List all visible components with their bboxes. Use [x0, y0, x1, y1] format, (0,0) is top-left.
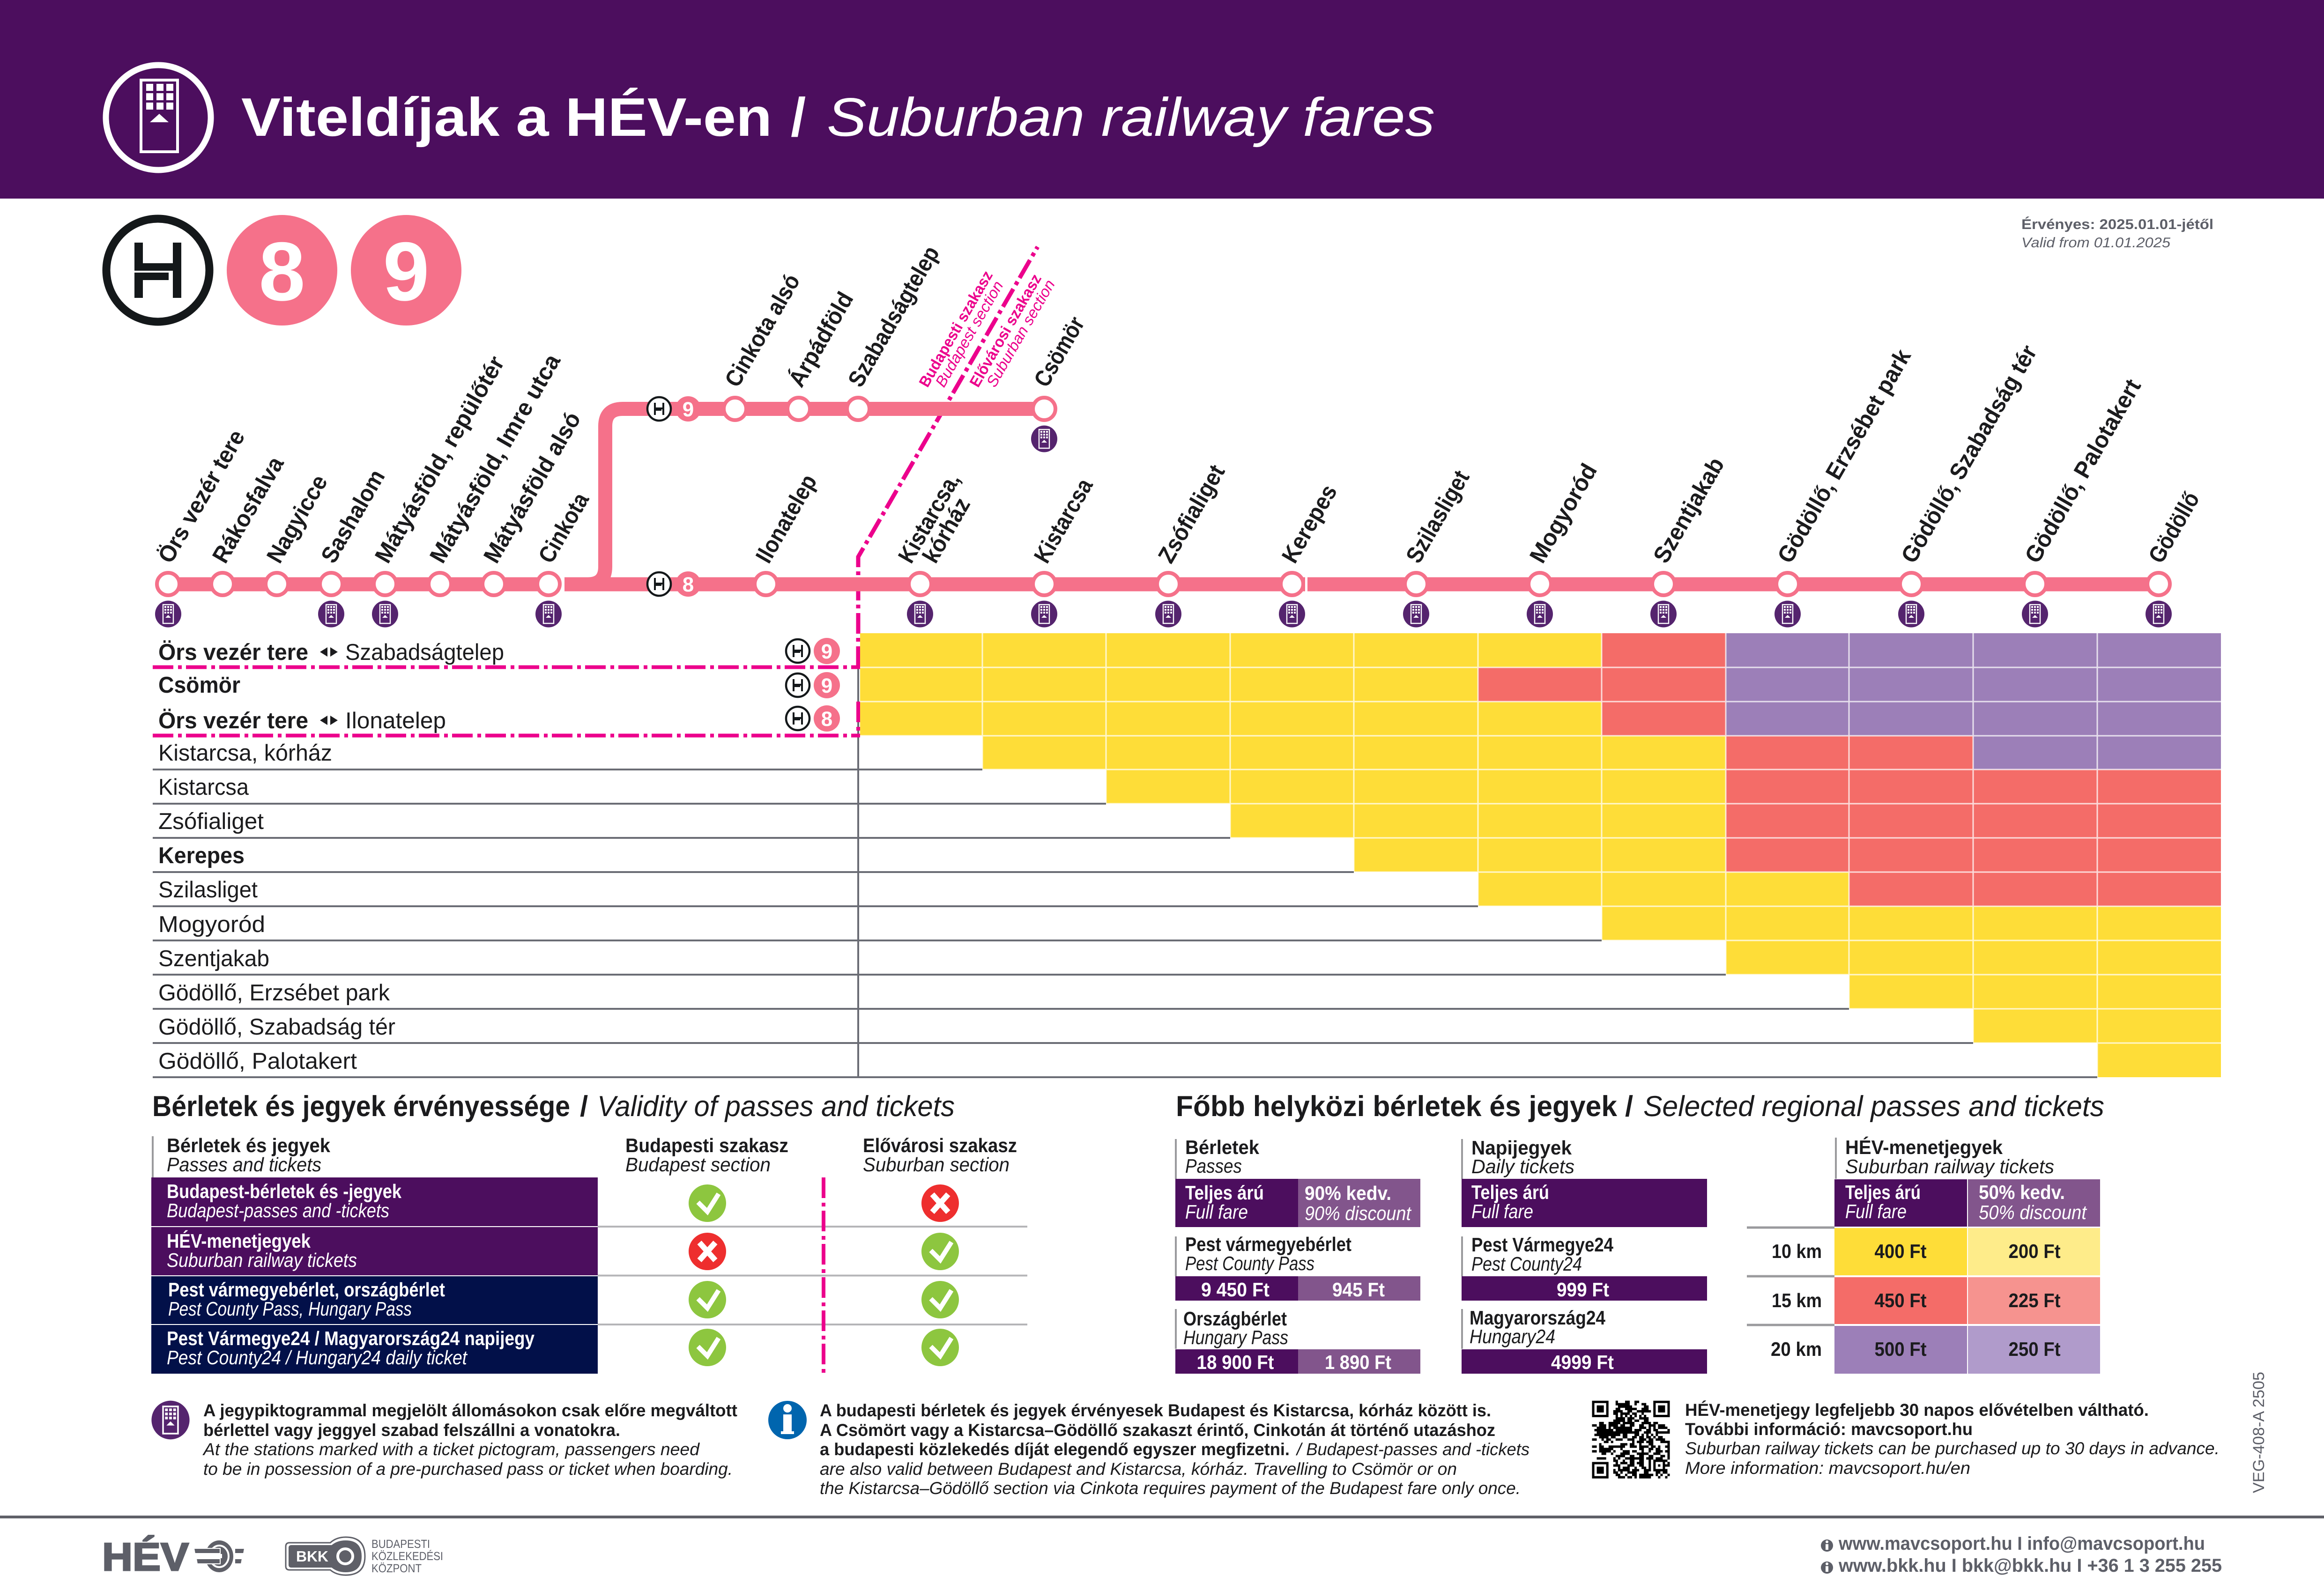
panel: HÉV tickets prices: 15 km [1772, 1289, 1822, 1311]
row: HÉV tickets: Suburban railway tickets [167, 1249, 357, 1271]
panel: HÉV tickets prices: HÉV-menetjegyek [1845, 1136, 2003, 1158]
note: ticket pictogram: to be in possession of a pre-purchased pass or ticket when boarding. [203, 1459, 733, 1479]
row: 24h tickets [151, 1325, 959, 1374]
origin station names: Szilasliget [158, 877, 258, 903]
panel: HÉV tickets prices: 20 km [1771, 1338, 1822, 1360]
note: HÉV ticket purchase: HÉV-menetjegy legfeljebb 30 napos elővételben váltható. [1685, 1400, 2149, 1420]
validity table header: Bérletek és jegyek [167, 1134, 331, 1156]
panel: passes prices: Országbérlet [1183, 1308, 1287, 1330]
origin station names: Szabadságtelep [345, 640, 504, 665]
heading: validity of passes: / [580, 1090, 588, 1123]
validity date [2021, 216, 2213, 251]
origin station names: Kistarcsa, kórház [158, 740, 332, 766]
origin station names: Örs vezér tere [158, 708, 308, 733]
station names: Rákosfalva [207, 451, 289, 568]
station names: Gödöllő, Palotakert [2020, 375, 2146, 568]
panel: daily tickets prices: 999 Ft [1557, 1279, 1609, 1301]
zone boundary labels: Budapesti szakasz [915, 268, 996, 390]
station names: Kerepes [1277, 480, 1342, 568]
panel: HÉV tickets prices: 500 Ft [1875, 1338, 1927, 1360]
panel: daily tickets prices: Daily tickets [1471, 1155, 1574, 1177]
origin station names: Kistarcsa [158, 775, 249, 800]
note: ticket pictogram [151, 1401, 737, 1479]
row: HÉV tickets: HÉV-menetjegyek [167, 1230, 311, 1252]
panel: validity table [151, 1134, 1027, 1374]
note: HÉV ticket purchase: Suburban railway tickets can be purchased up to 30 days in advance. [1685, 1439, 2220, 1458]
yellow fare cells: 400 Ft [860, 633, 2221, 1077]
panel: HÉV tickets prices: 50% discount [1979, 1201, 2087, 1223]
origin station names: Ilonatelep [345, 708, 446, 733]
origin station names: Szentjakab [158, 946, 269, 971]
note: validity info: are also valid between Budapest and Kistarcsa, kórház. Travelling to Csömör or on [820, 1459, 1457, 1479]
title: Viteldíjak a HÉV-en [241, 87, 772, 148]
row: county and Hungary passes [151, 1276, 959, 1324]
line marker: HÉV 8 on track: 8 [683, 573, 694, 596]
origin station names: Gödöllő, Erzsébet park [158, 980, 390, 1006]
origin station names: Örs vezér tere [158, 640, 308, 665]
heading: regional passes: / [1625, 1090, 1633, 1123]
station names: Nagyicce [261, 470, 333, 568]
origin station names: Gödöllő, Szabadság tér [158, 1014, 395, 1040]
panel: daily tickets prices: Magyarország24 [1470, 1307, 1606, 1329]
station names: Szentjakab [1648, 453, 1730, 568]
station names: Gödöllő [2143, 488, 2205, 568]
panel: daily tickets prices: 4999 Ft [1551, 1351, 1614, 1373]
title: / [791, 87, 806, 148]
line marker: HÉV 8 on track [647, 571, 701, 597]
logo: BKK: BUDAPESTI [371, 1538, 430, 1551]
validity table header: Elővárosi szakasz [863, 1134, 1017, 1156]
zone boundary labels [915, 268, 1058, 390]
station names: Mátyásföld, repülőtér [370, 351, 510, 568]
panel: daily tickets prices: Pest Vármegye24 [1471, 1234, 1614, 1256]
panel: passes prices: 90% kedv. [1305, 1182, 1391, 1204]
station names: Cinkota [533, 488, 594, 568]
note: ticket pictogram: At the stations marked with a ticket pictogram, passengers need [202, 1440, 700, 1459]
line marker: HÉV 9 on track: 9 [683, 398, 694, 421]
contact information: www.bkk.hu I bkk@bkk.hu I +36 1 3 255 255 [1838, 1555, 2222, 1576]
station names: Sashalom [316, 465, 390, 568]
station names [153, 242, 2205, 568]
panel: passes prices: 945 Ft [1332, 1279, 1385, 1301]
station names: Szilasliget [1401, 466, 1475, 568]
logo: BKK: KÖZLEKEDÉSI [371, 1550, 443, 1563]
row: 24h tickets: Pest Vármegye24 / Magyarország24 napijegy [167, 1327, 535, 1349]
line badges in table rows: 8 [821, 708, 832, 731]
badge: line 9: 9 [383, 225, 429, 318]
validity date: Valid from 01.01.2025 [2021, 235, 2170, 251]
footer divider [0, 1516, 2324, 1518]
badge: line 8: 8 [259, 225, 305, 318]
validity table header: Passes and tickets [167, 1154, 321, 1176]
panel: passes prices: Passes [1185, 1155, 1242, 1177]
zone boundary labels: Budapest section [932, 278, 1007, 390]
panel: daily tickets prices [1461, 1137, 1707, 1374]
panel: HÉV tickets prices: 10 km [1772, 1240, 1822, 1262]
route diagram track [168, 409, 2159, 593]
icon: ticket pictogram [106, 65, 211, 170]
row: Budapest passes: Budapest-passes and -tickets [167, 1199, 389, 1221]
row: HÉV tickets [151, 1227, 959, 1275]
title [241, 87, 1435, 148]
note: validity info: A budapesti bérletek és jegyek érvényesek Budapest és Kistarcsa, kórház között is. [820, 1401, 1491, 1420]
icon: information [768, 1401, 807, 1439]
panel: passes prices: Pest County Pass [1185, 1252, 1314, 1274]
note: ticket pictogram: bérlettel vagy jeggyel szabad felszállni a vonatokra. [203, 1421, 620, 1440]
panel: HÉV tickets prices: 400 Ft [1875, 1240, 1927, 1262]
origin station names [158, 640, 504, 1074]
header band [0, 0, 2324, 199]
note: validity info [768, 1401, 1530, 1498]
title: Suburban railway fares [827, 87, 1435, 148]
row: Budapest passes [151, 1177, 959, 1226]
note: HÉV ticket purchase: More information: mavcsoport.hu/en [1685, 1458, 1970, 1478]
panel: daily tickets prices: Napijegyek [1471, 1137, 1572, 1159]
panel: passes prices: Teljes árú [1185, 1182, 1264, 1204]
validity table header: Budapest section [625, 1154, 771, 1176]
note: HÉV ticket purchase [1685, 1400, 2220, 1478]
validity table header [152, 1134, 1017, 1177]
stations: branch line [724, 398, 1055, 420]
note: validity info: a budapesti közlekedés díját elegendő egyszer megfizetni. [820, 1440, 1290, 1459]
origin station names: Mogyoród [158, 912, 265, 937]
stations: main line [157, 573, 2170, 595]
panel: daily tickets prices: Pest County24 [1471, 1253, 1582, 1275]
station names: kórház [917, 493, 975, 568]
origin station names: Zsófialiget [158, 809, 264, 834]
station names: Ilonatelep [750, 470, 822, 568]
validity table header: Budapesti szakasz [625, 1134, 788, 1156]
heading: regional passes: Főbb helyközi bérletek és jegyek [1176, 1090, 1617, 1123]
icon: ticket note [151, 1401, 190, 1439]
panel: HÉV tickets prices: Full fare [1845, 1200, 1907, 1222]
panel: passes prices: 90% discount [1305, 1202, 1412, 1224]
contact information: www.mavcsoport.hu I info@mavcsoport.hu [1838, 1533, 2205, 1554]
station names: Örs vezér tere [153, 425, 250, 568]
QR code [1592, 1401, 1670, 1479]
heading: regional passes: Selected regional passes and tickets [1643, 1090, 2104, 1123]
panel: daily tickets prices: Full fare [1471, 1200, 1533, 1222]
contact information [1821, 1533, 2222, 1576]
station names: Csömör [1029, 312, 1090, 392]
note: validity info: the Kistarcsa–Gödöllő section via Cinkota requires payment of the Budapest fare only once. [820, 1479, 1521, 1498]
logo: BKK: BKK [296, 1548, 328, 1565]
heading: validity of passes: Bérletek és jegyek érvényessége [152, 1090, 570, 1123]
note: ticket pictogram: A jegypiktogrammal megjelölt állomásokon csak előre megváltott [203, 1401, 737, 1420]
line badges in table rows [786, 638, 840, 732]
panel: passes prices: 18 900 Ft [1196, 1351, 1274, 1373]
logo: BKK: KÖZPONT [371, 1562, 422, 1575]
station names: Gödöllő, Erzsébet park [1772, 345, 1916, 568]
panel: passes prices: 9 450 Ft [1201, 1279, 1270, 1301]
panel: passes prices: Bérletek [1185, 1136, 1260, 1158]
badge: line 9 [351, 215, 461, 326]
panel: HÉV tickets prices: 250 Ft [2009, 1338, 2061, 1360]
badge: line 8 [227, 215, 337, 326]
panel: daily tickets prices: Teljes árú [1471, 1181, 1549, 1203]
fare zone boundary line [858, 247, 1038, 667]
station names: Mogyoród [1524, 459, 1602, 568]
station names: Zsófialiget [1153, 460, 1230, 568]
panel: passes prices: Hungary Pass [1183, 1326, 1288, 1348]
origin station names: Csömör [158, 673, 240, 698]
icons: ticket-required stations [155, 425, 2172, 628]
station names: Gödöllő, Szabadság tér [1896, 340, 2042, 568]
row: county and Hungary passes: Pest County Pass, Hungary Pass [168, 1298, 412, 1320]
document code: VEG-408-A 2505 [2250, 1372, 2268, 1493]
note: HÉV ticket purchase: További információ: mavcsoport.hu [1685, 1420, 1973, 1439]
red fare cells: 450 Ft [1478, 633, 2221, 906]
logo: BKK [286, 1537, 443, 1575]
panel: HÉV tickets prices: 450 Ft [1875, 1289, 1927, 1311]
origin station names: Kerepes [158, 843, 245, 868]
zone boundary labels: Elővárosi szakasz [966, 271, 1045, 390]
zone boundary labels: Suburban section [983, 277, 1058, 390]
panel: daily tickets prices: Hungary24 [1470, 1325, 1555, 1347]
heading: validity of passes [152, 1090, 955, 1123]
heading: validity of passes: Validity of passes and tickets [597, 1090, 955, 1123]
row: Budapest passes: Budapest-bérletek és -jegyek [167, 1180, 402, 1202]
panel: passes prices [1175, 1136, 1420, 1374]
origin station names: Gödöllő, Palotakert [158, 1049, 357, 1074]
row: 24h tickets: Pest County24 / Hungary24 daily ticket [167, 1347, 468, 1369]
station names: Cinkota alsó [720, 269, 805, 392]
station names: Szabadságtelep [843, 242, 944, 392]
station names: Kistarcsa, [893, 468, 965, 568]
row: county and Hungary passes: Pest vármegyebérlet, országbérlet [168, 1279, 445, 1301]
station names: Mátyásföld alsó [478, 407, 586, 568]
line marker: HÉV 9 on track [647, 396, 701, 422]
line badges in table rows: 9 [821, 640, 832, 663]
panel: HÉV tickets prices [1747, 1136, 2100, 1374]
icon: HÉV logo [106, 219, 209, 322]
panel: HÉV tickets prices: 225 Ft [2009, 1289, 2061, 1311]
validity date: Érvényes: 2025.01.01-jétől [2021, 216, 2213, 232]
station names: Kistarcsa [1029, 474, 1098, 568]
heading: regional passes [1176, 1090, 2104, 1123]
line badges in table rows: 9 [821, 674, 832, 697]
panel: HÉV tickets prices: Teljes árú [1845, 1181, 1921, 1203]
panel: HÉV tickets prices: 50% kedv. [1979, 1181, 2065, 1203]
validity table header: Suburban section [863, 1154, 1010, 1176]
note: validity info: / Budapest-passes and -tickets [1295, 1440, 1530, 1459]
panel: passes prices: 1 890 Ft [1325, 1351, 1391, 1373]
fare matrix [153, 633, 2221, 1077]
line logos [106, 215, 461, 326]
station names: Mátyásföld, Imre utca [424, 349, 566, 568]
note: validity info: A Csömört vagy a Kistarcsa–Gödöllő szakaszt érintő, Cinkotán át történő utazáshoz [820, 1421, 1495, 1440]
panel: passes prices: Pest vármegyebérlet [1185, 1233, 1351, 1255]
logo: HÉV [102, 1535, 245, 1576]
purple fare cells: 500 Ft [1726, 633, 2221, 770]
panel: HÉV tickets prices: 200 Ft [2009, 1240, 2061, 1262]
panel: passes prices: Full fare [1185, 1201, 1248, 1223]
panel: HÉV tickets prices: Suburban railway tickets [1845, 1155, 2054, 1177]
station names: Árpádföld [783, 288, 859, 392]
